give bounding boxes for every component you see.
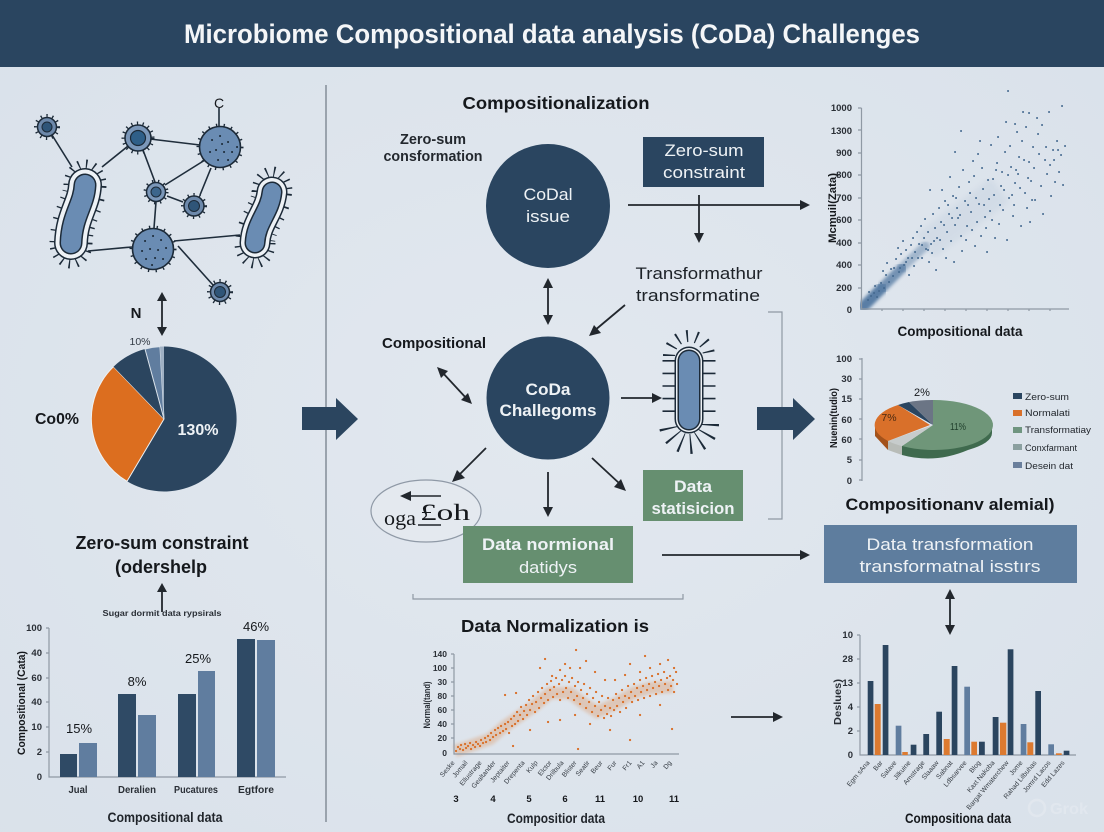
chart: 3D pie with legend: 2% (914, 387, 930, 399)
chart: multi bar chart: Edd Lazes (1041, 759, 1067, 789)
arrow: scatter to bars (731, 712, 783, 722)
arrow: network to pie (157, 292, 167, 336)
icon: small centre cell (146, 182, 166, 202)
chart: blue scatter (827, 91, 1069, 339)
chart: grouped bar chart: Compositional data (108, 810, 223, 825)
chart: multi bar chart: Jome (1008, 760, 1025, 777)
arrow: to statistics box (592, 458, 626, 491)
chart: 3D pie with legend (828, 354, 1091, 487)
chart: orange scatter: 80 (438, 691, 447, 701)
axis title: Deslues) (833, 679, 844, 725)
chart: multi bar chart: Bargat Wmaterchew (966, 760, 1011, 811)
node: CoDal issue: issue (526, 207, 570, 226)
chart: grouped bar chart: Pucatures (174, 784, 218, 796)
chart: orange scatter: 60 (438, 705, 447, 715)
chart: multi bar chart: 4 (848, 702, 854, 713)
chart: 3D pie with legend: 15 (841, 394, 853, 405)
chart: orange scatter: 4 (490, 794, 496, 805)
arrow: box down (694, 195, 704, 243)
box: data normalization: Data normional (482, 535, 614, 554)
chart: orange scatter: 30 (438, 677, 447, 687)
chart: grouped bar chart: Deralien (118, 784, 156, 796)
chart: multi bar chart: Salave (880, 760, 899, 780)
arrow: to oval (452, 448, 486, 482)
chart: multi bar chart (833, 630, 1076, 826)
chart: orange scatter: 40 (438, 719, 447, 729)
chart: orange scatter: 3 (453, 794, 459, 805)
text: transformation (636, 264, 763, 305)
chart: 3D pie with legend: 60 (841, 435, 852, 446)
heading: compositionalization: Compositionalization (462, 93, 650, 113)
icon: small cell top left (36, 116, 58, 138)
legend: Desein dat (1025, 461, 1073, 472)
icon: right rod bacterium (240, 172, 287, 263)
chart: blue scatter: 0 (847, 305, 852, 316)
chart: 3D pie with legend: 7% (881, 412, 897, 424)
chart: multi bar chart: Kaxt Nakoba (966, 760, 997, 794)
chart: grouped bar chart (16, 619, 286, 825)
chart: 3D pie with legend: 0 (847, 476, 852, 487)
chart: orange scatter: 100 (433, 663, 447, 673)
legend: Transformatiay (1025, 425, 1091, 436)
chart: orange scatter (422, 649, 680, 826)
icon: left rod bacterium (55, 165, 101, 263)
chart: multi bar chart: Amstrage (902, 760, 927, 787)
icon: large spotted cell centre (132, 228, 174, 270)
box: data transformation (824, 525, 1077, 583)
box: data normalization (463, 526, 633, 583)
chart: multi bar chart: 13 (842, 678, 853, 689)
chart: orange scatter: 11 (595, 794, 606, 805)
chart: orange scatter: Blister (561, 759, 579, 779)
axis title: Mcmuil(Zata) (827, 173, 839, 243)
chart: 3D pie with legend: 11% (950, 421, 966, 433)
chart: grouped bar chart: 25% (185, 651, 211, 666)
chart: orange scatter: Drilbula (545, 760, 566, 782)
node: CoDa challenges (486, 336, 610, 460)
chart: orange scatter: Jomail (452, 759, 470, 779)
text: zero-sum consformation (384, 132, 482, 165)
box: data transformation: transformatnal isstırs (860, 557, 1040, 576)
text: zero-sum consformation: consformation (384, 149, 482, 165)
box: data transformation: Data transformation (866, 535, 1034, 554)
arrow: transformation to challenges (589, 305, 625, 336)
pie value: 130% (178, 422, 219, 439)
chart: grouped bar chart: 46% (243, 619, 269, 634)
text: compositional: Compositional (382, 335, 486, 352)
chart: orange scatter: Seske (439, 760, 457, 779)
chart: blue scatter: 1300 (831, 126, 852, 137)
3D pie (875, 400, 993, 459)
chart: orange scatter: Ellustrage (459, 760, 484, 787)
chart: 3D pie with legend: 30 (841, 374, 852, 385)
chart: multi bar chart: Compositiona data (905, 811, 1011, 826)
chart: orange scatter: 10 (633, 794, 643, 805)
chart: orange scatter: Fur (607, 759, 619, 772)
chart: grouped bar chart: 40 (31, 648, 42, 659)
chart: orange scatter: Seatir (575, 759, 592, 778)
chart: 3D pie with legend: 60 (841, 415, 852, 426)
icon: bacterium (669, 336, 709, 444)
arrow: to normalization box (543, 472, 553, 517)
chart: orange scatter: Dg (663, 760, 674, 771)
box: zero-sum constraint: Zero-sum (664, 141, 744, 160)
chart: composition pie (91, 346, 237, 491)
legend: Conxfarmant (1025, 443, 1077, 454)
arrow: box to bars (945, 589, 955, 635)
chart: multi bar chart: 28 (842, 654, 853, 665)
chart: blue scatter: 800 (836, 170, 852, 181)
chart: orange scatter: Gealtander (471, 759, 498, 790)
watermark: Grok (1029, 800, 1088, 818)
chart: grouped bar chart: 15% (66, 721, 92, 736)
heading: zero-sum constraint (76, 533, 248, 577)
chart: grouped bar chart: 60 (31, 673, 42, 684)
arrow: to microbe (621, 393, 662, 403)
legend: Zero-sum (1025, 392, 1069, 403)
chart: orange scatter: Beur (590, 759, 605, 775)
box: data normalization: datidys (519, 558, 577, 577)
node: CoDal issue: CoDal (524, 185, 572, 204)
text: transformation: Transformathur (636, 264, 763, 283)
chart: blue scatter: 1000 (831, 103, 852, 114)
box: zero-sum constraint (643, 137, 764, 187)
box: data statistics: statisicion (652, 499, 734, 518)
arrow: normalization to transformation (662, 550, 810, 560)
label: pie small percentage: 10% (129, 336, 151, 348)
node: CoDa challenges: Challegoms (500, 401, 596, 420)
chart: grouped bar chart: 40 (31, 697, 42, 708)
chart: orange scatter: 140 (433, 649, 447, 659)
arrow: up to heading (157, 583, 167, 612)
chart: multi bar chart: 2 (848, 726, 853, 737)
chart: grouped bar chart: 8% (128, 674, 147, 689)
chart: multi bar chart: 0 (848, 750, 853, 761)
chart: multi bar chart: Ldbsarvee (943, 760, 969, 789)
chart: blue scatter: 600 (836, 215, 852, 226)
chart: orange scatter: 0 (442, 748, 447, 758)
arrow: compositional double (437, 367, 472, 404)
node: CoDa challenges: CoDa (526, 380, 571, 399)
chart: grouped bar chart: Jual (68, 784, 88, 796)
chart: blue scatter: Compositional data (898, 323, 1023, 339)
chart: blue scatter: 900 (836, 148, 852, 159)
chart: blue scatter: 700 (836, 193, 852, 204)
chart: multi bar chart: Blog (968, 760, 983, 775)
chart: multi bar chart: Slaaaw (921, 760, 941, 781)
chart: orange scatter: Fr1 (622, 760, 634, 772)
axis title: Compositional (Cata) (16, 651, 28, 755)
chart: orange scatter: Drepenta (503, 760, 527, 786)
icon: small cell bottom (210, 282, 230, 302)
axis title: Nuenin(tudio) (828, 388, 840, 448)
chart: 3D pie with legend: 100 (836, 354, 852, 365)
icon: large spotted cell top right (199, 126, 241, 168)
chart: orange scatter: Kulp (525, 760, 540, 775)
chart: orange scatter: 5 (526, 794, 532, 805)
chart: blue scatter: 400 (836, 238, 852, 249)
box: data statistics: Data (674, 477, 713, 496)
legend (1013, 392, 1091, 472)
chart: grouped bar chart: Egtfore (238, 784, 274, 796)
arrow: block arrow left (302, 398, 358, 440)
chart: multi bar chart: Bar (872, 759, 885, 772)
icon: ringed cell (124, 124, 152, 152)
title: Microbiome Compositional data analysis (CoDa) Challenges (184, 19, 920, 49)
axis title: Normal(tand) (422, 681, 432, 728)
text: zero-sum consformation: Zero-sum (400, 132, 466, 148)
text: transformation: transformatine (636, 286, 760, 305)
chart: grouped bar chart: 100 (26, 623, 42, 634)
callout: oval symbol: £oh (420, 500, 471, 525)
chart: multi bar chart: Jomrd Lacos (1022, 759, 1053, 794)
arrow: to right scatter (628, 200, 810, 210)
chart: orange scatter: Ja (650, 760, 660, 770)
node: CoDal issue (486, 144, 610, 268)
chart: multi bar chart: Sabnat (935, 760, 955, 781)
arrow: between circles (543, 278, 553, 325)
caption: chart subtitle: Sugar dormit data rypsirals (102, 608, 222, 618)
chart: orange scatter: 11 (669, 794, 680, 805)
chart: orange scatter: Jeptaiter (489, 759, 512, 784)
heading: zero-sum constraint: Zero-sum constraint (76, 533, 248, 553)
header banner (0, 0, 1104, 67)
heading: compositional right: Compositionanv alemial) (846, 495, 1054, 514)
chart: grouped bar chart: 2 (37, 747, 42, 758)
label: N: N (131, 305, 141, 322)
callout: oval symbol (371, 480, 481, 542)
label: C: C (214, 95, 224, 111)
chart: orange scatter: Compositior data (507, 811, 605, 826)
box: data statistics (643, 470, 743, 521)
arrow: block arrow right (757, 398, 815, 440)
chart: orange scatter: 6 (562, 794, 568, 805)
chart: grouped bar chart: 0 (37, 772, 42, 783)
chart: blue scatter: 400 (836, 260, 852, 271)
chart: multi bar chart: 10 (842, 630, 853, 641)
chart: multi bar chart: Jilkuine (893, 760, 913, 782)
chart: grouped bar chart: 10 (31, 722, 42, 733)
chart: multi bar chart: Rahad Lilbuhas (1003, 759, 1039, 800)
chart: 3D pie with legend: 5 (847, 455, 853, 466)
legend: Normalati (1025, 408, 1070, 419)
heading: data normalization: Data Normalization is (461, 616, 649, 636)
chart: orange scatter: 20 (438, 733, 447, 743)
watermark: Grok: Grok (1050, 801, 1088, 818)
icon: small cell right (184, 196, 204, 216)
heading: zero-sum constraint: (odershelp (115, 557, 207, 577)
callout: oval symbol: oga (384, 508, 416, 530)
chart: blue scatter: 200 (836, 283, 852, 294)
label: pie left: Co0% (35, 411, 79, 428)
box: zero-sum constraint: constraint (663, 163, 745, 182)
chart: orange scatter: Elctor (537, 759, 554, 778)
chart: orange scatter: A1 (636, 760, 647, 771)
panel: microbe network (36, 95, 287, 302)
chart: multi bar chart: Egm sAna (846, 760, 872, 788)
